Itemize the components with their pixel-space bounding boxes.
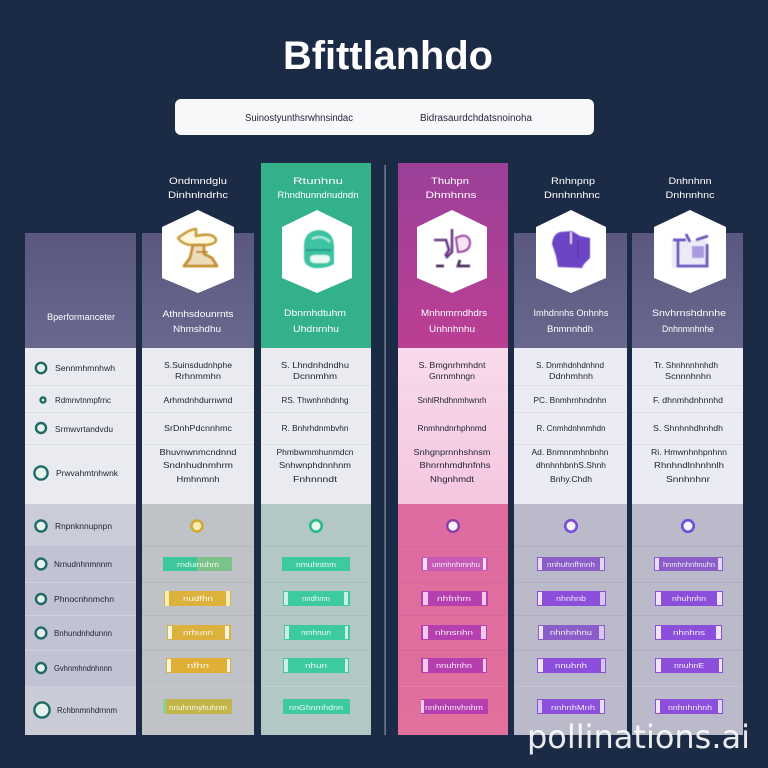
column 5 feature text: Snnhnhnr [666,474,710,484]
subtitle bar: Suinostyunthsrwhnsindac [245,113,353,124]
column 2 feature text [276,360,354,484]
column 5 pills: nhnhns [673,628,705,637]
column 1 pills: nnuhnmyhuhnm [169,703,227,712]
column 5 pills: nhuhnhn [672,594,706,603]
column 1 feature text: Bhuvnwnmcndnnd [160,447,237,457]
column 1 feature text: Hmhnmnh [176,474,220,484]
column 4 feature text: dhnhnhbnhS.Shnh [536,460,606,470]
column 2 heading: Rtunhnu [293,176,343,186]
row label text: Prwvahmtnhwnk [56,468,119,478]
column 2 pills: nnGhnmhdnn [289,703,343,712]
column 5 feature text [651,360,727,484]
column 3 pills: nhnsnhn [435,628,473,637]
icon: gold hexagon badge [162,210,234,293]
column 2 heading: Rhndhunndnudndn [278,190,358,200]
column 2 pills: nmhnun [301,628,331,637]
panel: column 5 violet [632,176,743,735]
column 1 heading [168,176,229,200]
panel: column 3 magenta [398,163,508,735]
column 1 subheading: Nhmshdhu [173,324,221,334]
icon: magenta hexagon badge [417,210,487,293]
column 3 subheading: Mnhnmrndhdrs [421,308,488,318]
row label text: Phnocnhnmchn [54,594,114,604]
panel: column 2 green [261,163,371,735]
column 4 heading [544,176,601,200]
column 3 heading: Dhmhnns [426,190,477,200]
column 2 pills: nmuhntnm [296,560,336,569]
column 1 heading: Ondmndglu [169,176,227,186]
column 4 subheading [534,308,609,334]
row label text: Rdmnvtnmpfrnc [55,395,112,405]
center divider [384,165,386,735]
column 5 heading [666,176,715,200]
column 1 feature text: SrDnhPdcnnhmc [164,423,233,433]
column 3 pills: unmhnhmnhu [432,560,480,569]
column 1 feature text: Rrhnmmhn [175,371,221,381]
row label text: Bnhundnhdunnn [54,628,112,638]
column 1 pills: nudfhn [183,594,213,603]
row label text [54,363,119,715]
watermark: pollinations.ai [527,718,750,756]
column 5 pills: nnhnhnhnh [668,703,712,712]
column 4 feature text: Ddnhmhnh [549,371,593,381]
column 1 heading: Dinhnlndrhc [168,190,229,200]
icon: violet hexagon badge [536,210,606,293]
column 2 feature text: R. Bnhrhdnmbvhn [282,423,349,433]
column 3 feature text: Snhgnprnnhshnsm [414,447,490,457]
column 2 pills: nndhmn [302,594,330,603]
column 3 heading [426,176,477,200]
column 4 heading: Rnhnpnp [551,176,595,186]
column 5 pills [654,557,723,714]
column 4 pills: nhnhnb [556,594,586,603]
column 3 subheading [421,308,488,334]
panel: column 4 violet [514,176,627,735]
column 1 feature text: Sndnhudnmhrm [163,460,233,470]
icon: lavender hexagon badge [654,210,726,293]
row label text: Nrnudnhnmnnm [54,559,112,569]
column 3 heading: Thuhpn [431,176,469,186]
column 4 subheading: Imhdnnhs Onhnhs [534,308,609,318]
row label text: Rnpnknnupnpn [55,521,112,531]
column 5 feature text: Ri. Hmwnhnhpnhnn [651,447,727,457]
column 1 subheading [162,309,234,334]
column 5 heading: Dnhnnhnc [666,190,715,200]
column 4 subheading: Bnmnnhdh [547,324,593,334]
column 4 feature text: Bnhy.Chdh [550,474,592,484]
column 4 pills: nnuhnh [555,661,587,670]
column 1 feature text [160,360,237,484]
column 4 pills: nnhuhnfhnnh [547,560,595,569]
panel: row labels column [25,233,136,735]
column 2 subheading: Dbnmhdtuhm [284,308,346,318]
column 5 feature text: S. Shnhnhdhnhdh [653,423,723,433]
column 3 feature text: Rnmhndnrhphnmd [418,423,487,433]
column 3 status dot [447,520,459,532]
column 2 status dot [310,520,322,532]
subtitle bar [175,99,594,135]
column 2 feature text: Snhwnphdnnhnm [279,460,351,470]
column 2 feature text: RS. Thwnhnhdnhg [282,395,349,405]
column 4 pills: nnhnhMnh [551,703,595,712]
column 5 pills: nnuhnE [674,661,704,670]
column 2 subheading: Uhdnrnhu [293,324,339,334]
column 5 feature text: F. dhnmhdnhnnhd [653,395,723,405]
column 5 feature text: Scnnnhnhn [665,371,711,381]
column 4 pills [537,557,606,714]
column 4 feature text: Ad. Bnmnnmhnbnhn [532,447,609,457]
panel: column 1 gold [142,176,254,735]
column 2 heading [278,176,358,200]
column 3 feature text: SnhlRhdhnmhwnrh [418,395,487,405]
column 4 feature text [532,360,609,484]
column 3 pills: nnuhnhn [436,661,472,670]
column 5 feature text: Tr. Shnhnnhnhdh [654,360,718,370]
column 4 feature text: S. Dnmhdnhdnhnd [536,360,604,370]
column 1 feature text: Arhmdnhdurnwnd [164,395,233,405]
column 4 pills: nhnhnhnu [550,628,592,637]
icon: green hexagon badge [282,210,352,293]
column 3 feature text: Gnrnmhngn [429,371,475,381]
column 2 feature text: S. Lhndnhdndhu [281,360,349,370]
column 2 feature text: Fnhnnndt [293,474,338,484]
column 4 feature text: PC. Bnmhrnhndnhn [534,395,607,405]
row label text: Gvhnmhndnhnnn [54,663,112,673]
row label text: Sennmhmnhwh [55,363,115,373]
column 5 feature text: Rhnhndlnhnhnlh [654,460,724,470]
column 2 feature text: Phmbwmmhunmdcn [276,447,354,457]
column 5 heading: Dnhnhnn [668,176,712,186]
column 3 feature text: Nhgnhmdt [430,474,475,484]
column 1 feature text: S.Suinsdudnhphe [164,360,232,370]
column 3 subheading: Unhnhnhu [429,324,475,334]
column 1 pills [163,557,232,714]
column 3 pills [421,557,488,714]
row label text: Rchbnmnhdrnnm [57,705,117,715]
column 1 status dot [192,520,202,532]
column 2 pills [282,557,350,714]
column 5 status dot [682,520,694,532]
row label icons [34,363,50,718]
column 4 heading: Dnnhnnhnc [544,190,601,200]
column 2 feature text: Dcnnmhm [293,371,337,381]
column 5 subheading [652,308,726,334]
row label text: Srmwvrtandvdu [55,424,113,434]
column 4 feature text: R. Cnmhdnhnmhdn [536,423,606,433]
column 2 pills: nhun [305,661,327,670]
column 4 status dot [565,520,577,532]
column 3 feature text: S. Bmgnrhmhdnt [418,360,486,370]
column 5 pills: hnmhnhnhnuhn [663,560,715,569]
column 3 feature text: Bhnrnhmdhnfnhs [420,460,490,470]
column 1 pills: rnduinuhm [177,560,219,569]
column 1 subheading: Athnhsdounrnts [162,309,234,319]
column 5 subheading: Dnhnmnhnhe [662,324,714,334]
column 1 pills: nfhn [187,661,209,670]
column 3 pills: nhfnhm [437,594,471,603]
column 5 subheading: Snvhrnshdnnhe [652,308,726,318]
column 1 pills: nrhunn [183,628,213,637]
title: Bfittlanhdo [283,34,493,78]
panel: row labels column: Bperformanceter [47,312,115,322]
column 3 feature text [414,360,490,484]
column 3 pills: nnhnhmvhnhm [425,703,483,712]
column 2 subheading [284,308,346,334]
subtitle bar: Bidrasaurdchdatsnoinoha [420,113,532,124]
